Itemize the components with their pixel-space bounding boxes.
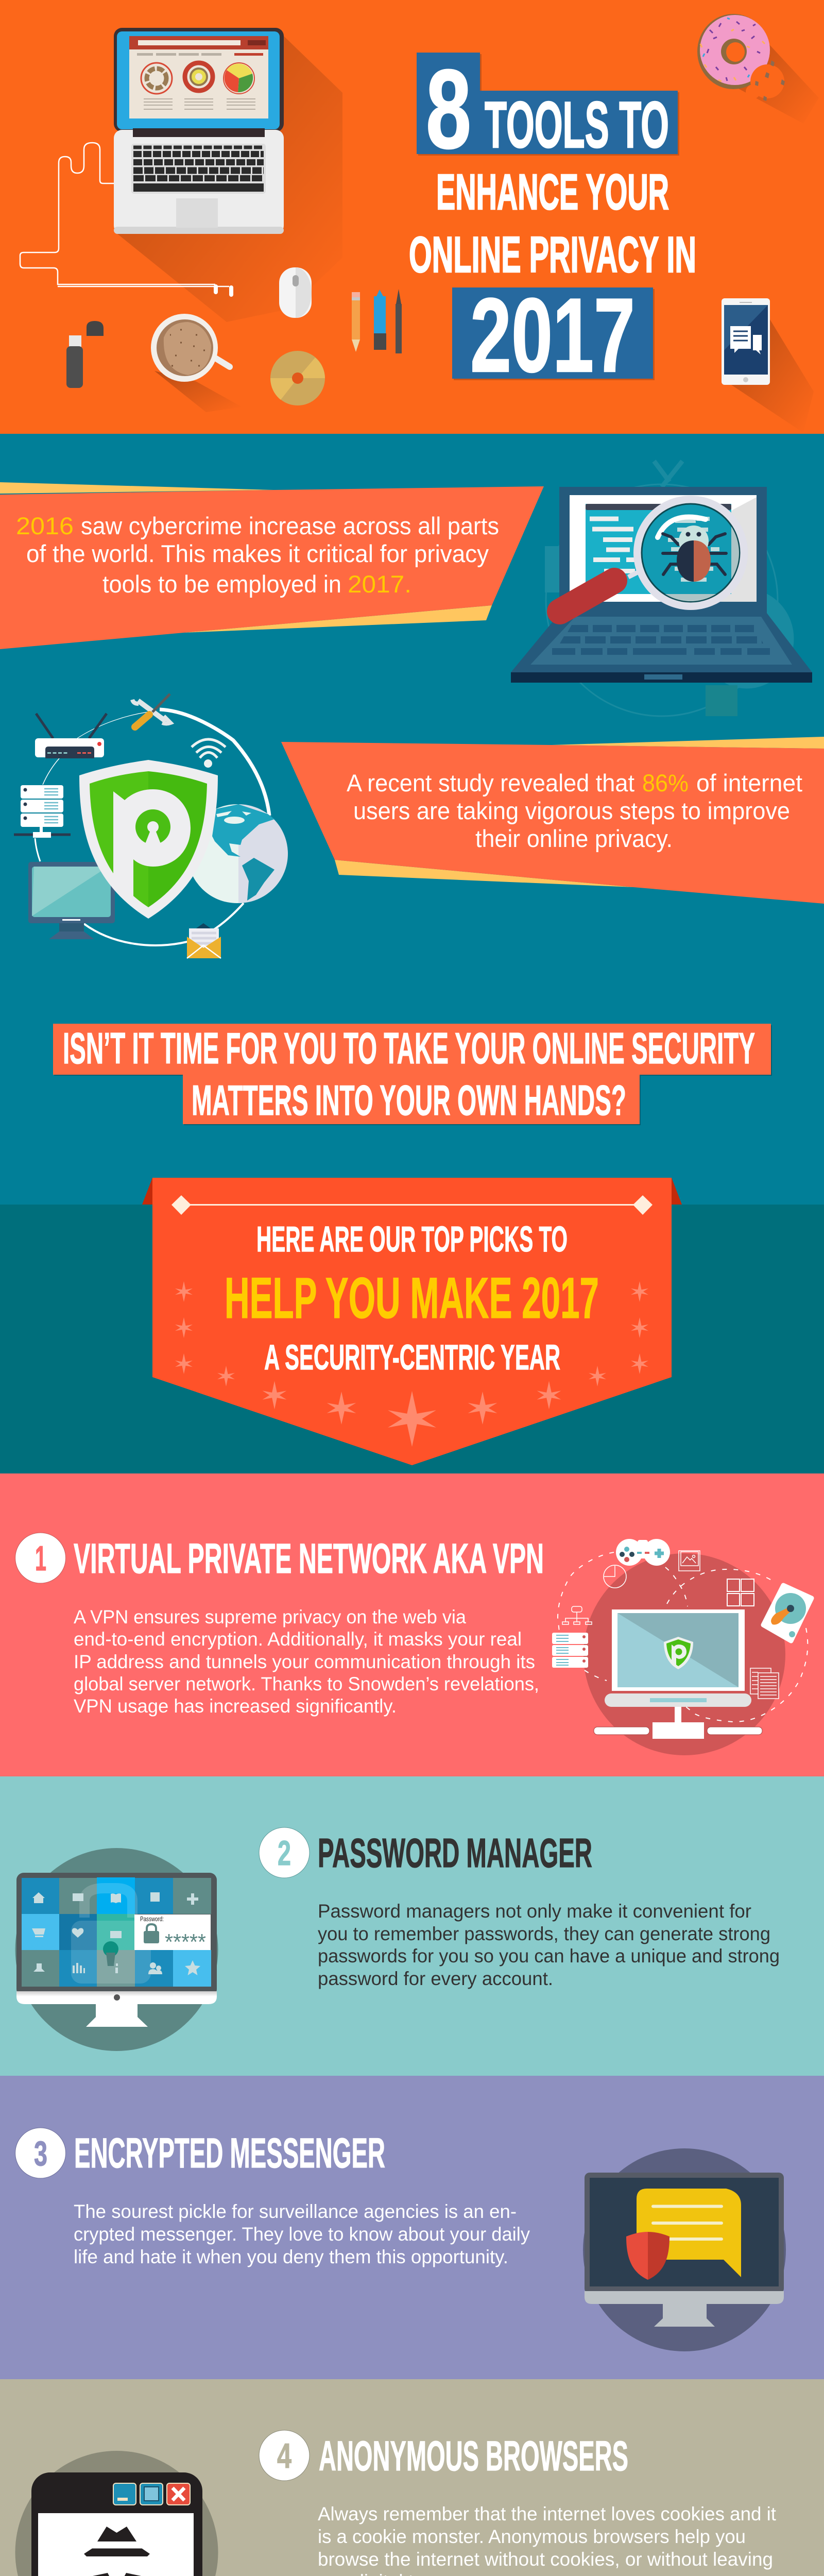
icon: hard disk xyxy=(763,1585,812,1641)
panel: header xyxy=(0,0,824,434)
icon: monitor with chat bubble and shield xyxy=(583,2148,786,2351)
description: end-to-end encryption. Additionally, it masks your real xyxy=(74,1629,522,1650)
description: browse the internet without cookies, or without leaving xyxy=(318,2549,773,2570)
panel: tool 4 anonymous browsers xyxy=(0,2379,824,2576)
callout: cybercrime: tools to be employed in xyxy=(102,570,341,598)
heading: PASSWORD MANAGER xyxy=(318,1830,592,1876)
number badge 2: 2 xyxy=(278,1834,291,1873)
description xyxy=(74,1606,539,1717)
faint globe graphic xyxy=(545,461,793,716)
icon: server stack xyxy=(552,1633,588,1668)
panel: intro statistics xyxy=(0,434,824,1205)
description: VPN usage has increased significantly. xyxy=(74,1696,397,1717)
icon: documents xyxy=(750,1668,779,1699)
icon: incognito browser window xyxy=(15,2451,218,2576)
icon: windows xyxy=(727,1579,754,1606)
description: passwords for you so you can have a unique and strong xyxy=(318,1945,780,1967)
callout: cybercrime xyxy=(0,482,544,649)
icon: globe xyxy=(187,804,288,903)
description: you to remember passwords, they can generate strong xyxy=(318,1923,770,1944)
icon: coffee cup xyxy=(151,314,242,412)
callout: survey xyxy=(281,737,824,904)
icon: donut xyxy=(697,14,819,124)
description: life and hate it when you deny them this opportunity. xyxy=(74,2246,508,2267)
icon: VPN shield network xyxy=(14,694,288,958)
number badge 1 xyxy=(15,1533,66,1583)
callout: survey: A recent study revealed that xyxy=(347,769,634,796)
icon: mouse xyxy=(279,267,312,318)
icon: envelope xyxy=(187,923,221,958)
icon: servers xyxy=(14,737,71,838)
icon: monitor with password tiles: ***** xyxy=(165,1929,206,1955)
description: IP address and tunnels your communication through its xyxy=(74,1651,535,1672)
description: Always remember that the internet loves cookies and it xyxy=(318,2503,777,2524)
description: Password managers not only make it convenient for xyxy=(318,1901,751,1922)
icon: router xyxy=(35,714,107,758)
banner: top picks: A SECURITY-CENTRIC YEAR xyxy=(264,1337,560,1377)
icon: earphones xyxy=(20,143,231,295)
icon: shield logo xyxy=(79,760,218,919)
icon: monitor with password tiles: Password: xyxy=(140,1916,164,1923)
callout: cybercrime: of the world. This makes it critical for privacy xyxy=(26,540,489,567)
icon: wifi xyxy=(192,739,226,768)
question heading xyxy=(53,1024,772,1125)
callout: cybercrime: saw cybercrime increase across all parts xyxy=(81,512,499,539)
icon: tools xyxy=(132,694,170,727)
icon: laptop xyxy=(114,28,342,322)
icon: VPN monitor and devices xyxy=(552,1539,812,1755)
description: password for every account. xyxy=(318,1968,553,1989)
callout: survey: of internet xyxy=(696,769,802,796)
title xyxy=(409,47,696,394)
number badge 4 xyxy=(259,2430,310,2481)
number badge 3 xyxy=(15,2128,66,2178)
description: is a cookie monster. Anonymous browsers help you xyxy=(318,2526,746,2547)
heading: ENCRYPTED MESSENGER xyxy=(74,2130,385,2177)
title: TOOLS TO xyxy=(485,88,669,161)
icon: cd xyxy=(270,351,325,405)
callout: cybercrime: 2017. xyxy=(348,570,411,598)
banner: top picks: HERE ARE OUR TOP PICKS TO xyxy=(256,1219,568,1259)
description: A VPN ensures supreme privacy on the web via xyxy=(74,1606,466,1628)
description xyxy=(318,2503,777,2576)
number badge 4: 4 xyxy=(277,2436,291,2476)
callout: survey: their online privacy. xyxy=(475,825,673,852)
banner: top picks xyxy=(142,1178,682,1465)
number badge 2 xyxy=(259,1827,310,1878)
icon: photo xyxy=(679,1551,700,1571)
panel: tool 2 password manager xyxy=(0,1776,824,2076)
panel: tool 3 encrypted messenger xyxy=(0,2076,824,2379)
description xyxy=(318,1901,780,1989)
number badge 1: 1 xyxy=(35,1539,46,1578)
description: global server network. Thanks to Snowden’s revelations, xyxy=(74,1673,539,1694)
icon: pie chart xyxy=(604,1565,626,1588)
icon: gamepad xyxy=(616,1539,670,1566)
icon: usb drive xyxy=(66,321,104,388)
callout: cybercrime: 2016 xyxy=(16,512,74,539)
title: 2017 xyxy=(470,277,635,394)
dark teal band xyxy=(0,1205,824,1473)
description xyxy=(74,2201,530,2267)
description: The sourest pickle for surveillance agencies is an en- xyxy=(74,2201,517,2222)
icon: monitor xyxy=(28,862,115,939)
title: 8 xyxy=(426,47,471,172)
callout: survey: users are taking vigorous steps to improve xyxy=(353,797,790,824)
description: crypted messenger. They love to know about your daily xyxy=(74,2224,530,2245)
icon: smartphone xyxy=(722,298,814,433)
panel: tool 1 VPN xyxy=(0,1473,824,1776)
icon: org chart xyxy=(562,1606,592,1624)
decorative stars xyxy=(175,1281,648,1447)
icon: monitor with password tiles xyxy=(15,1848,218,2051)
icon: pencil and markers xyxy=(352,289,402,353)
callout: survey: 86% xyxy=(642,769,689,796)
number badge 3: 3 xyxy=(34,2134,47,2173)
icon: laptop with bug under magnifier xyxy=(511,487,812,683)
